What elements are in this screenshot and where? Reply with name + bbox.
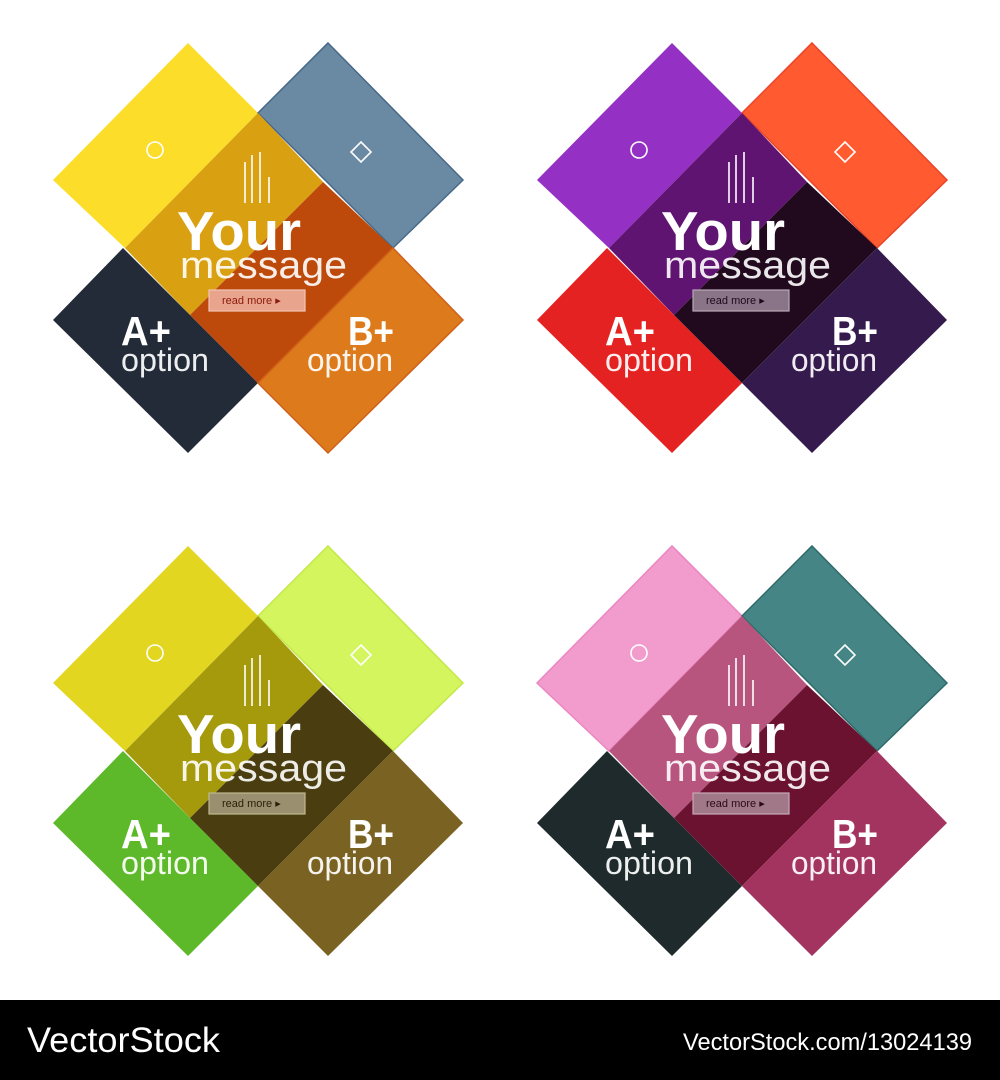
panel: group 1 (yellow/blue/orange) (53, 43, 463, 453)
panel: group 4 (pink/teal/crimson) (537, 546, 947, 956)
panel: group 2 (purple/red) (537, 43, 947, 453)
footer: logo text: VectorStock (27, 1021, 221, 1060)
footer bar (0, 1000, 1000, 1080)
button: read more (693, 290, 789, 311)
button: read more: read more ▸ (222, 798, 281, 810)
footer: url text: VectorStock.com/13024139 (683, 1029, 972, 1056)
button: read more: read more ▸ (706, 295, 765, 307)
button: read more: read more ▸ (706, 798, 765, 810)
button: read more (693, 793, 789, 814)
button: read more (209, 290, 305, 311)
button: read more: read more ▸ (222, 295, 281, 307)
panel: group 3 (olive/lime/green) (53, 546, 463, 956)
button: read more (209, 793, 305, 814)
